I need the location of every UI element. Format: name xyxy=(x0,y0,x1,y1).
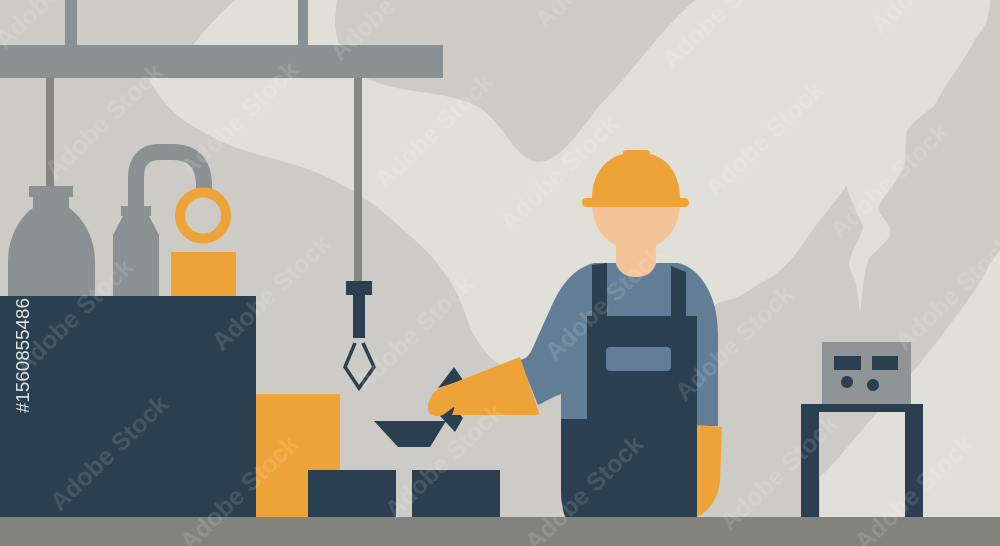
watermark text: Adobe Stock xyxy=(45,390,174,516)
watermark text: Adobe Stock xyxy=(670,280,799,406)
ceiling beam and hangers xyxy=(0,0,443,78)
bottle: large xyxy=(8,186,95,296)
ring xyxy=(180,192,226,238)
worker head xyxy=(592,164,680,250)
apron pocket xyxy=(606,347,671,371)
watermark text: Adobe Stock xyxy=(175,56,304,182)
pipe connecting bottle and ring xyxy=(136,152,204,208)
watermark text: Adobe Stock xyxy=(825,118,954,244)
worker shirt and arm xyxy=(520,263,718,426)
watermark text: Adobe Stock xyxy=(380,398,509,524)
dark crates xyxy=(308,470,500,517)
background: light lower right area xyxy=(820,250,1000,517)
worker apron xyxy=(561,263,697,517)
watermark text: Adobe Stock xyxy=(350,270,479,396)
watermark text: Adobe Stock xyxy=(495,110,624,236)
orange box on table xyxy=(171,252,236,296)
robotic claw xyxy=(345,78,374,388)
rod: left hanger xyxy=(46,78,54,187)
crystal held in glove xyxy=(438,367,463,432)
worker neck xyxy=(616,240,656,277)
worker hard hat xyxy=(582,150,689,207)
machine on stand xyxy=(801,342,923,517)
watermark text: Adobe Stock xyxy=(715,410,844,536)
background: light smoke cloud xyxy=(148,0,990,385)
table block xyxy=(0,296,256,517)
worker glove, hanging hand xyxy=(697,425,722,517)
worker xyxy=(428,150,722,517)
bowl xyxy=(374,421,446,447)
watermark text: Adobe Stock xyxy=(10,253,139,379)
watermark text: Adobe Stock xyxy=(40,58,169,184)
watermark text: Adobe Stock xyxy=(370,68,499,194)
stock id text: #1560855486 xyxy=(12,298,33,413)
watermark text: Adobe Stock xyxy=(540,240,669,366)
watermark text: Adobe Stock xyxy=(700,76,829,202)
floor xyxy=(0,517,1000,546)
orange crate xyxy=(256,394,340,517)
worker glove, right hand reaching xyxy=(428,357,539,416)
watermark text: Adobe Stock xyxy=(207,230,336,356)
bottle: small xyxy=(113,206,159,296)
